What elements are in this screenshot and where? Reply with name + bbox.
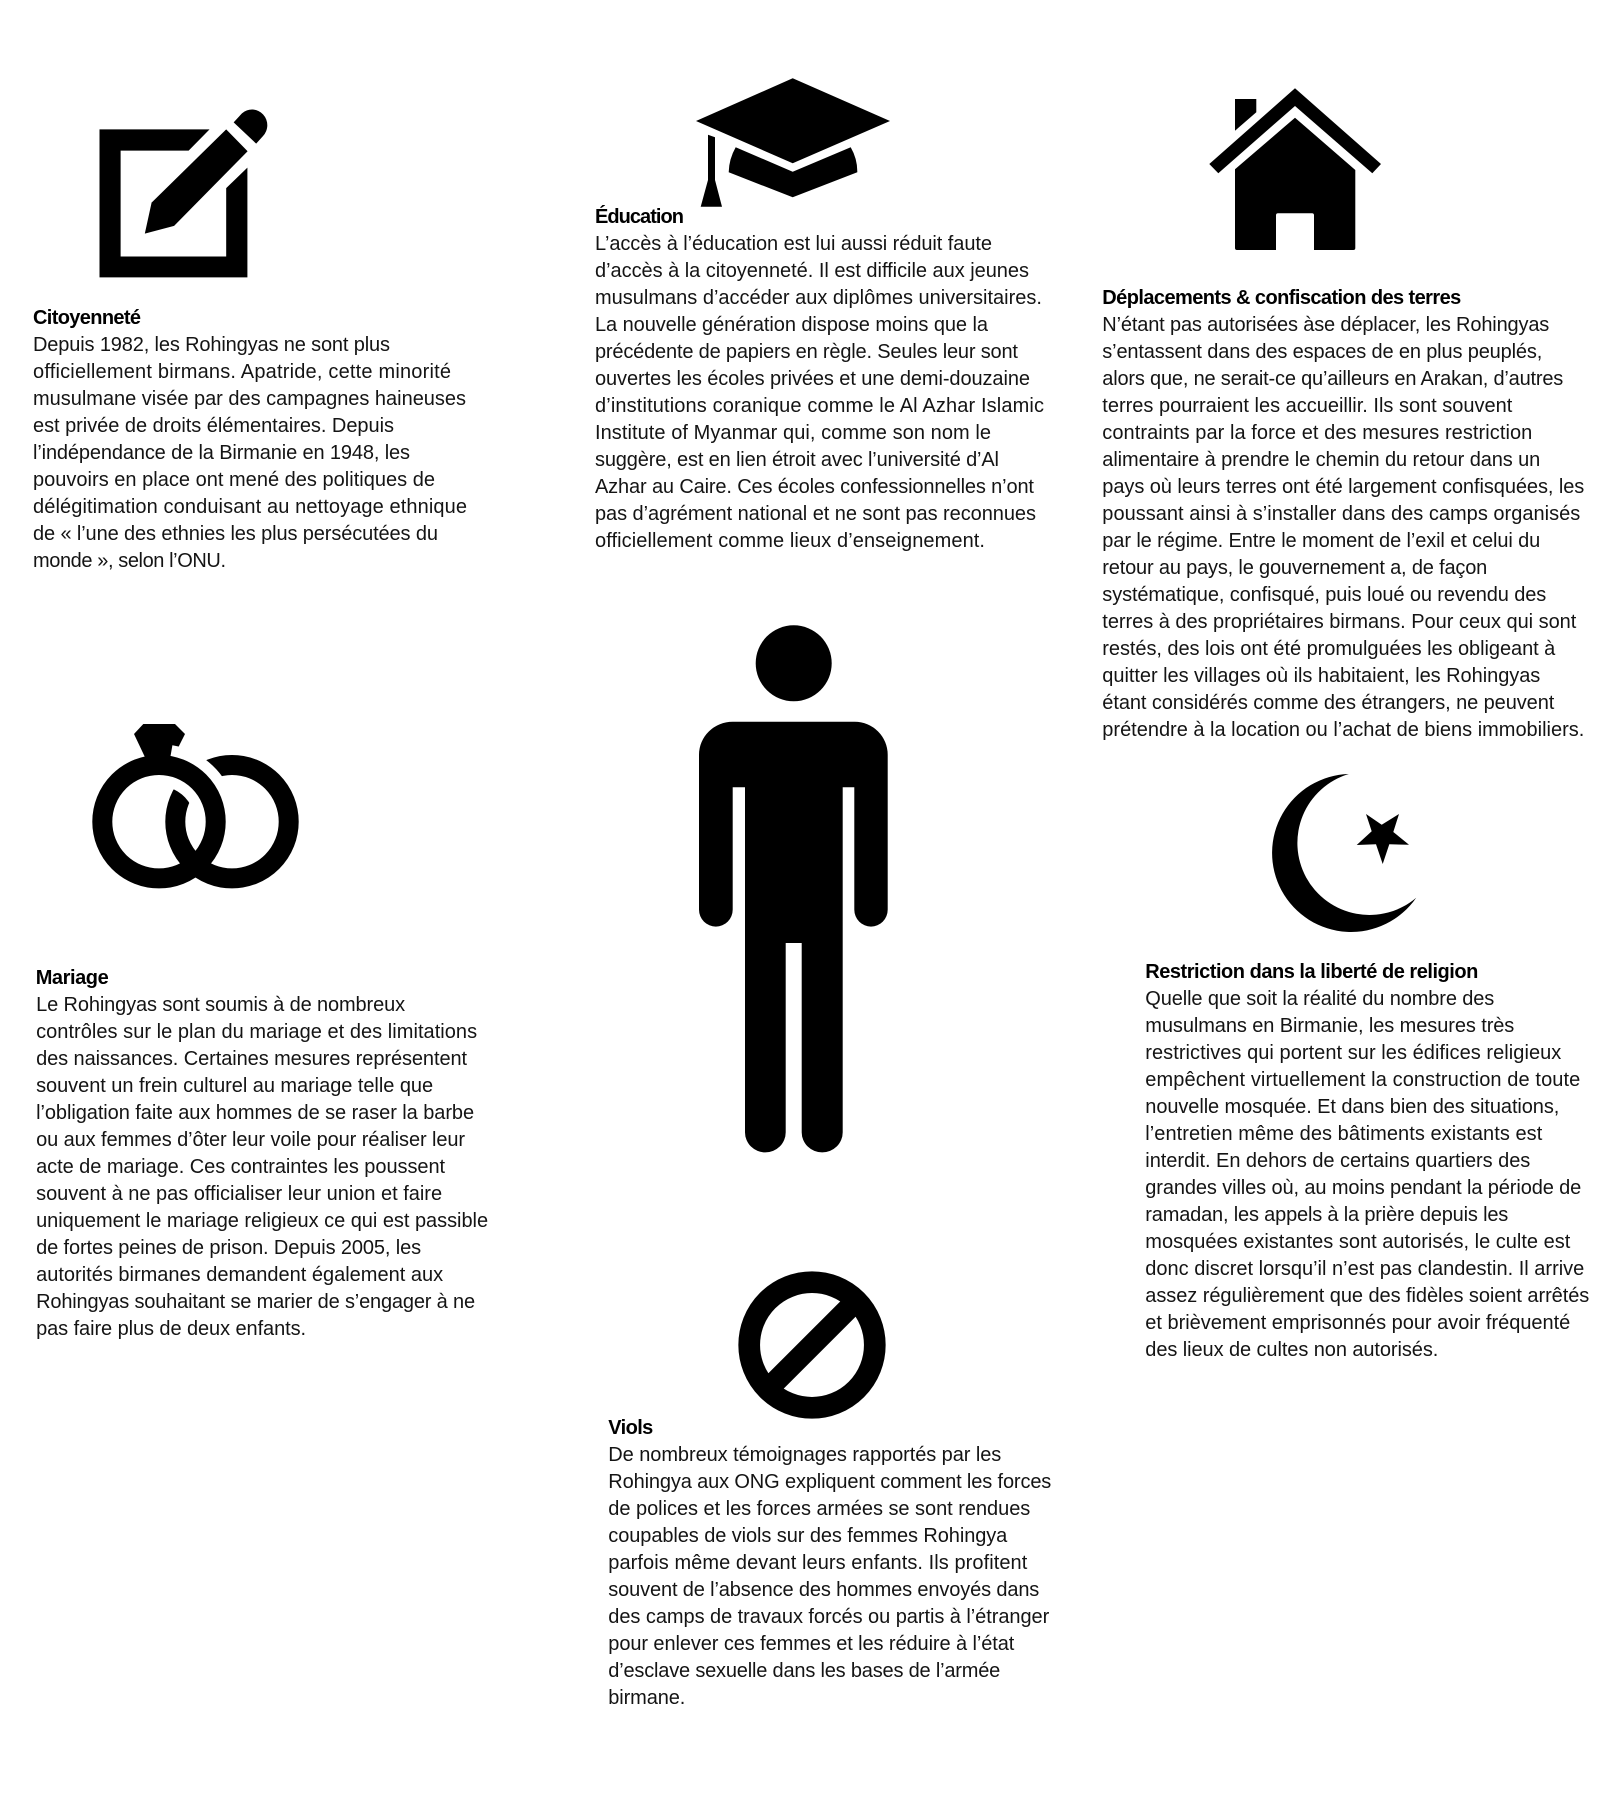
panel: mariage <box>36 724 488 1340</box>
text: citoyenneté <box>33 334 467 572</box>
text: religion: Quelle que soit la réalité du nombre des <box>1145 988 1494 1010</box>
text: éducation <box>595 233 1044 552</box>
icon: prohibition sign <box>749 1282 875 1408</box>
text: religion: nouvelle mosquée. Et dans bien des situations, <box>1145 1096 1559 1118</box>
panel: citoyenneté <box>33 110 467 572</box>
text: viols: De nombreux témoignages rapportés par les <box>608 1444 1001 1466</box>
text: religion: des lieux de cultes non autorisés. <box>1145 1339 1438 1361</box>
text: déplacements: quitter les villages où ils habitaient, les Rohingyas <box>1102 665 1540 687</box>
text: viols: coupables de viols sur des femmes Rohingya <box>608 1525 1008 1547</box>
text: viols: birmane. <box>608 1687 685 1709</box>
panel: viols <box>608 1282 1051 1709</box>
heading: Citoyenneté: Citoyenneté <box>33 307 141 329</box>
icon: pencil on square <box>100 110 267 277</box>
text: citoyenneté: Depuis 1982, les Rohingyas ne sont plus <box>33 334 390 356</box>
icon: crescent and star <box>1272 774 1416 932</box>
text: éducation: précédente de papiers en règle. Seules leur sont <box>595 341 1018 363</box>
text: mariage: autorités birmanes demandent également aux <box>36 1264 443 1286</box>
text: éducation: Azhar au Caire. Ces écoles confessionnelles n’ont <box>595 476 1034 498</box>
text: viols: des camps de travaux forcés ou partis à l’étranger <box>608 1606 1050 1628</box>
text: religion: l’entretien même des bâtiments existants est <box>1145 1123 1543 1145</box>
text: mariage: souvent un frein culturel au mariage telle que <box>36 1075 433 1097</box>
text: religion: mosquées existantes sont autorisés, le culte est <box>1145 1231 1571 1253</box>
text: mariage: souvent à ne pas officialiser leur union et faire <box>36 1183 442 1205</box>
text: mariage: ou aux femmes d’ôter leur voile pour réaliser leur <box>36 1129 465 1151</box>
text: viols: pour enlever ces femmes et les réduire à l’état <box>608 1633 1015 1655</box>
text: mariage: pas faire plus de deux enfants. <box>36 1318 306 1340</box>
text: citoyenneté: délégitimation conduisant au nettoyage ethnique <box>33 496 467 518</box>
panel: éducation <box>595 78 1044 552</box>
heading: Déplacements & confiscation des terres: Déplacements & confiscation des terres <box>1102 287 1461 309</box>
text: religion: donc discret lorsqu’il n’est pas clandestin. Il arrive <box>1145 1258 1584 1280</box>
icon: house <box>1209 88 1381 250</box>
text: citoyenneté: est privée de droits élémentaires. Depuis <box>33 415 394 437</box>
text: déplacements: N’étant pas autorisées àse déplacer, les Rohingyas <box>1102 314 1549 336</box>
text: déplacements: étant considérés comme des étrangers, ne peuvent <box>1102 692 1555 714</box>
text: mariage: contrôles sur le plan du mariage et des limitations <box>36 1021 477 1043</box>
text: éducation: L’accès à l’éducation est lui aussi réduit faute <box>595 233 992 255</box>
text: éducation: Institute of Myanmar qui, comme son nom le <box>595 422 991 444</box>
heading: Restriction dans la liberté de religion: Restriction dans la liberté de religion <box>1145 961 1478 983</box>
text: déplacements: alors que, ne serait-ce qu’ailleurs en Arakan, d’autres <box>1102 368 1563 390</box>
text: déplacements: contraints par la force et des mesures restriction <box>1102 422 1532 444</box>
text: déplacements: pays où leurs terres ont été largement confisquées, les <box>1102 476 1584 498</box>
text: religion: grandes villes où, au moins pendant la période de <box>1145 1177 1581 1199</box>
text: religion: assez régulièrement que des fidèles soient arrêtés <box>1145 1285 1589 1307</box>
text: déplacements: retour au pays, le gouvernement a, de façon <box>1102 557 1487 579</box>
text: viols: de polices et les forces armées se sont rendues <box>608 1498 1030 1520</box>
text: déplacements: par le régime. Entre le moment de l’exil et celui du <box>1102 530 1540 552</box>
text: religion: restrictives qui portent sur les édifices religieux <box>1145 1042 1561 1064</box>
text: éducation: La nouvelle génération dispose moins que la <box>595 314 989 336</box>
heading: Viols: Viols <box>608 1417 653 1439</box>
text: viols: souvent de l’absence des hommes envoyés dans <box>608 1579 1039 1601</box>
text: religion: et brièvement emprisonnés pour avoir fréquenté <box>1145 1312 1570 1334</box>
text: mariage: Le Rohingyas sont soumis à de nombreux <box>36 994 405 1016</box>
text: citoyenneté: officiellement birmans. Apatride, cette minorité <box>33 361 451 383</box>
text: viols: parfois même devant leurs enfants. Ils profitent <box>608 1552 1028 1574</box>
text: religion: interdit. En dehors de certains quartiers des <box>1145 1150 1530 1172</box>
heading: Éducation: Éducation <box>595 205 684 228</box>
heading: Mariage: Mariage <box>36 967 109 989</box>
text: citoyenneté: monde », selon l’ONU. <box>33 550 226 572</box>
text: éducation: pas d’agrément national et ne sont pas reconnues <box>595 503 1036 525</box>
text: déplacements <box>1102 314 1584 741</box>
icon: wedding rings <box>102 724 289 878</box>
text: éducation: suggère, est en lien étroit avec l’université d’Al <box>595 449 999 471</box>
text: déplacements: alimentaire à prendre le chemin du retour dans un <box>1102 449 1540 471</box>
icon: standing person <box>699 625 888 1152</box>
text: déplacements: terres pourraient les accueillir. Ils sont souvent <box>1102 395 1513 417</box>
text: éducation: ouvertes les écoles privées et une demi-douzaine <box>595 368 1030 390</box>
text: citoyenneté: pouvoirs en place ont mené des politiques de <box>33 469 435 491</box>
text: mariage: des naissances. Certaines mesures représentent <box>36 1048 468 1070</box>
text: éducation: musulmans d’accéder aux diplômes universitaires. <box>595 287 1042 309</box>
text: viols <box>608 1444 1051 1709</box>
text: mariage: l’obligation faite aux hommes de se raser la barbe <box>36 1102 474 1124</box>
text: déplacements: prétendre à la location ou l’achat de biens immobiliers. <box>1102 719 1584 741</box>
panel: déplacements et confiscation des terres <box>1102 88 1584 741</box>
text: déplacements: systématique, confisqué, puis loué ou revendu des <box>1102 584 1546 606</box>
text: citoyenneté: musulmane visée par des campagnes haineuses <box>33 388 466 410</box>
text: mariage <box>36 994 488 1340</box>
text: déplacements: s’entassent dans des espaces de en plus peuplés, <box>1102 341 1542 363</box>
text: mariage: Rohingyas souhaitant se marier de s’engager à ne <box>36 1291 475 1313</box>
text: mariage: de fortes peines de prison. Depuis 2005, les <box>36 1237 421 1259</box>
text: religion: empêchent virtuellement la construction de toute <box>1145 1069 1580 1091</box>
text: religion: musulmans en Birmanie, les mesures très <box>1145 1015 1514 1037</box>
text: viols: Rohingya aux ONG expliquent comment les forces <box>608 1471 1051 1493</box>
text: mariage: acte de mariage. Ces contraintes les poussent <box>36 1156 446 1178</box>
text: mariage: uniquement le mariage religieux ce qui est passible <box>36 1210 488 1232</box>
text: citoyenneté: de « l’une des ethnies les plus persécutées du <box>33 523 438 545</box>
text: religion <box>1145 988 1589 1361</box>
text: déplacements: restés, des lois ont été promulguées les obligeant à <box>1102 638 1556 660</box>
text: éducation: officiellement comme lieux d’enseignement. <box>595 530 985 552</box>
panel: restriction dans la liberté de religion <box>1145 774 1589 1361</box>
text: déplacements: poussant ainsi à s’installer dans des camps organisés <box>1102 503 1580 525</box>
text: religion: ramadan, les appels à la prière depuis les <box>1145 1204 1508 1226</box>
text: viols: d’esclave sexuelle dans les bases de l’armée <box>608 1660 1000 1682</box>
text: citoyenneté: l’indépendance de la Birmanie en 1948, les <box>33 442 410 464</box>
icon: graduation cap <box>696 78 890 207</box>
text: éducation: d’accès à la citoyenneté. Il est difficile aux jeunes <box>595 260 1029 282</box>
text: déplacements: terres à des propriétaires birmans. Pour ceux qui sont <box>1102 611 1577 633</box>
text: éducation: d’institutions coranique comme le Al Azhar Islamic <box>595 395 1044 417</box>
